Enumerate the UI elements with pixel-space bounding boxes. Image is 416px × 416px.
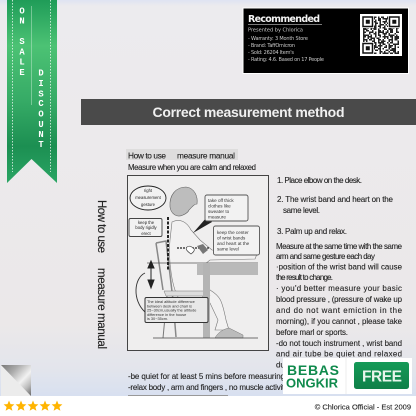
explanatory paragraph: · you'd better measure your basic bbox=[276, 284, 402, 293]
hair bbox=[170, 187, 197, 216]
callout: keep center of wrist bands: same level bbox=[217, 246, 239, 252]
ribbon text: discount: S bbox=[38, 90, 44, 100]
numbered steps bbox=[277, 176, 394, 236]
explanatory paragraph: arm and same gesture each day bbox=[276, 252, 375, 261]
manual heading: How to use bbox=[128, 150, 166, 160]
explanatory paragraph: and air tube be quiet and relaxed bbox=[276, 350, 402, 358]
heading bar: correct measurement method: Correct measurement method bbox=[152, 104, 344, 120]
bottom instructions: -relax body , arm and fingers , no muscle activity bbox=[128, 383, 288, 392]
callout: keep center of wrist bands bbox=[214, 226, 260, 255]
star rating bbox=[4, 400, 62, 411]
product details: - Warranty: 3 Month Store bbox=[248, 36, 308, 42]
ribbon: on sale discount bbox=[7, 0, 57, 183]
recommended panel bbox=[243, 8, 408, 74]
ribbon text: discount: U bbox=[38, 120, 44, 130]
explanatory paragraph: the result to change. bbox=[276, 273, 333, 282]
explanatory paragraph: Measure at the same time with the same bbox=[276, 242, 403, 251]
callout: right measurement gesture bbox=[130, 186, 166, 210]
chair bbox=[156, 241, 176, 337]
callout: take off thick clothes bbox=[205, 195, 248, 221]
pointer wedge bbox=[193, 217, 212, 233]
callout: ideal altitude difference: difference in the house bbox=[147, 312, 186, 317]
numbered steps: same level. bbox=[283, 206, 320, 215]
product details: - Sold: 26204 Item's bbox=[248, 50, 294, 56]
explanatory paragraph: -do not touch instrument , wrist band bbox=[276, 339, 402, 348]
person body bbox=[169, 220, 257, 330]
bottom instructions bbox=[128, 372, 288, 392]
wrist cuff bbox=[197, 244, 208, 254]
product details: Presented by Chlorica bbox=[248, 28, 303, 34]
callout: keep body erect: erect bbox=[141, 231, 151, 236]
callout: take off thick clothes: clothes like bbox=[208, 204, 231, 208]
vertical title: how to use measure manual: How to use bbox=[95, 200, 107, 253]
ribbon text: on sale: A bbox=[19, 48, 25, 58]
ribbon text: on sale: E bbox=[19, 68, 25, 78]
foot bbox=[215, 328, 243, 338]
callout: take off thick clothes: measure bbox=[208, 214, 226, 220]
callout: ideal altitude difference: The ideal altitude difference bbox=[147, 299, 195, 304]
dashed level guides bbox=[167, 217, 169, 270]
diagram: correct sitting posture bbox=[128, 176, 268, 350]
callout: right measurement gesture: gesture bbox=[141, 202, 156, 207]
ribbon text: on sale: L bbox=[19, 58, 25, 68]
bebas ongkir logo bbox=[286, 362, 339, 390]
free shipping badge bbox=[283, 358, 412, 394]
ribbon text: on sale: N bbox=[19, 16, 25, 26]
callout: ideal altitude difference: is 30~35cm. bbox=[147, 316, 168, 321]
callout: ideal altitude difference: 25~30cm,usually the altitude bbox=[147, 308, 196, 312]
callout: keep body erect bbox=[129, 218, 162, 236]
ribbon text: discount: D bbox=[38, 68, 44, 78]
bebas ongkir logo: ONGKIR bbox=[286, 376, 339, 390]
explanatory paragraph: blood pressure , (pressure of wake up bbox=[276, 295, 403, 304]
manual heading bbox=[126, 149, 256, 172]
numbered steps: 2. The wrist band and heart on the bbox=[277, 195, 394, 204]
explanatory paragraph: morning), if you cannot , please take bbox=[276, 317, 403, 326]
callout: keep body erect: body rigidly bbox=[135, 225, 157, 230]
footer band bbox=[0, 396, 416, 416]
callout: take off thick clothes: sweater to bbox=[208, 209, 230, 214]
recommended heading: Recommended bbox=[248, 14, 320, 25]
callout: ideal altitude difference: between desk and chair is bbox=[147, 304, 192, 308]
heading bar: correct measurement method bbox=[81, 99, 416, 125]
manual subheading: Measure when you are calm and relaxed bbox=[128, 163, 256, 172]
callout: keep center of wrist bands: of wrist bands bbox=[217, 236, 246, 240]
callout: right measurement gesture: measurement bbox=[135, 195, 162, 200]
ribbon text: discount: T bbox=[38, 140, 44, 150]
numbered steps: 3. Palm up and relax. bbox=[277, 227, 347, 236]
product details: - Rating: 4.6. Based on 17 People bbox=[248, 57, 324, 63]
callout: take off thick clothes: take off thick bbox=[208, 198, 234, 203]
explanatory paragraph: and do not want emiction in the bbox=[276, 306, 403, 315]
callout: keep center of wrist bands: keep the center bbox=[217, 230, 249, 235]
ribbon text: on sale: S bbox=[19, 37, 25, 47]
ribbon text: discount: C bbox=[38, 99, 44, 109]
page curl bbox=[1, 365, 31, 396]
callout: right measurement gesture: right bbox=[144, 188, 153, 193]
explanatory paragraph bbox=[276, 242, 403, 370]
copyright: © Chlorica Official - Est 2009 bbox=[315, 402, 411, 412]
product details bbox=[248, 28, 324, 63]
vertical title: how to use measure manual bbox=[95, 200, 107, 349]
numbered steps: 1. Place elbow on the desk. bbox=[277, 176, 362, 185]
callout: ideal altitude difference bbox=[145, 298, 208, 322]
explanatory paragraph: during bbox=[276, 360, 298, 370]
product details: - Brand: TaffOmicron bbox=[248, 43, 295, 49]
explanatory paragraph: ·position of the wrist band will cause bbox=[276, 262, 403, 272]
explanatory paragraph: before marl or sports. bbox=[276, 328, 348, 337]
height arrow bbox=[148, 261, 154, 288]
callout: keep body erect: keep the bbox=[138, 220, 155, 225]
QR code bbox=[360, 14, 402, 56]
desk bbox=[147, 262, 258, 264]
bottom instructions: -be quiet for at least 5 mins before measuring bbox=[128, 372, 285, 381]
free button: FREE bbox=[362, 368, 402, 386]
manual heading: measure manual bbox=[177, 150, 235, 160]
clipped third line bbox=[128, 395, 228, 396]
ribbon text: discount: I bbox=[38, 79, 44, 89]
ribbon text: discount: O bbox=[38, 110, 44, 120]
vertical title: how to use measure manual: measure manual bbox=[95, 268, 107, 349]
bebas ongkir logo: BEBAS bbox=[287, 362, 339, 378]
ribbon text: on sale: O bbox=[19, 6, 25, 16]
callout: keep center of wrist bands: and heart at the bbox=[217, 241, 250, 246]
ribbon text: discount: N bbox=[38, 130, 44, 140]
